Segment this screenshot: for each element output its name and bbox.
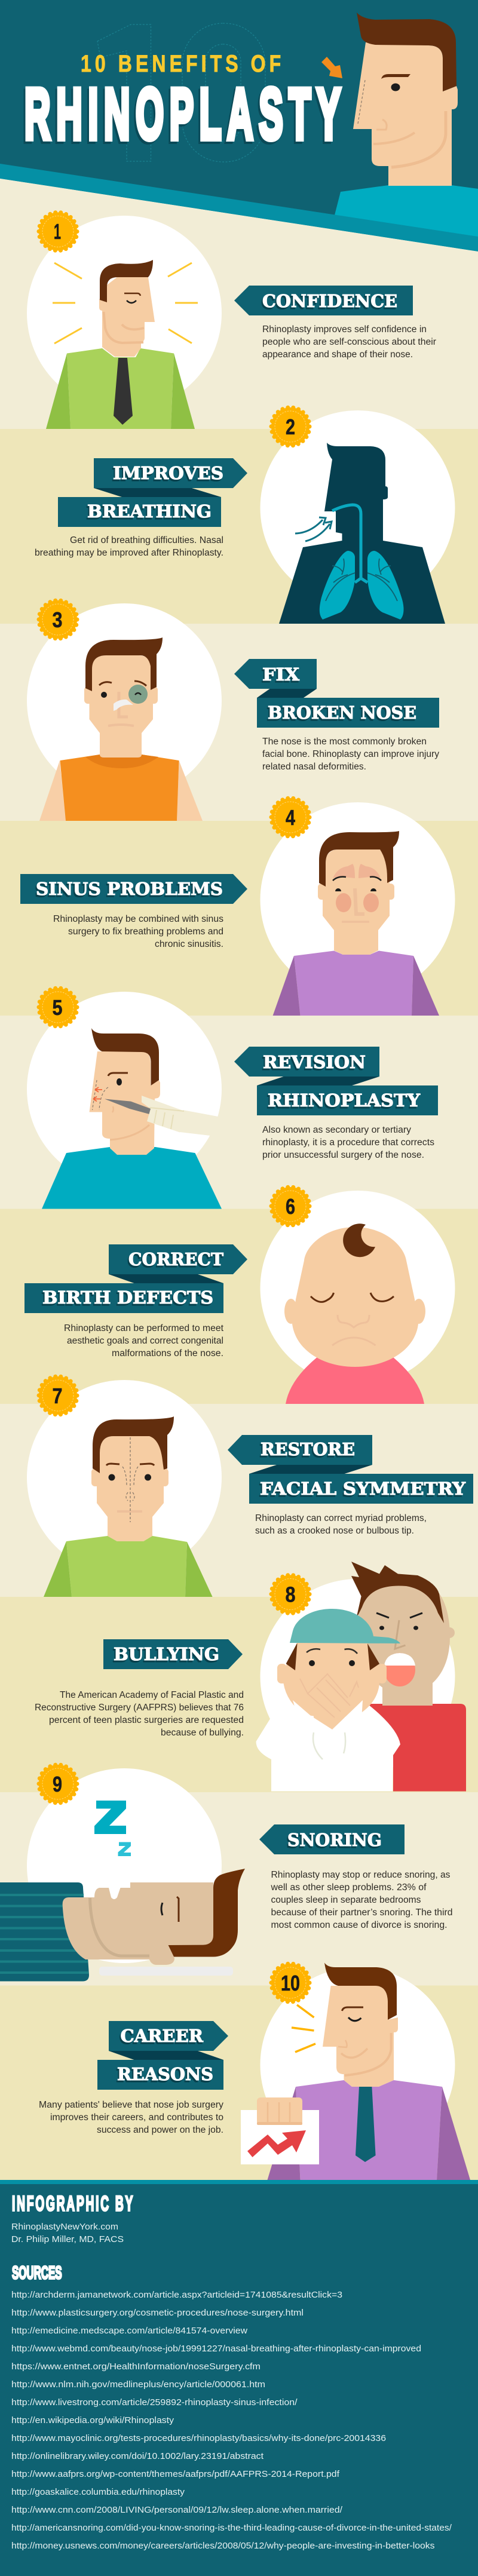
character: sleeping man bbox=[0, 1869, 245, 1981]
ribbon heading: bullying: BULLYING bbox=[114, 1644, 219, 1664]
text: birth defects description: malformations of the nose. bbox=[112, 1348, 223, 1358]
list: source urls: http://americansnoring.com/did-you-know-snoring-is-the-third-leading-cause-of-divorce-in-the-united-states/ bbox=[11, 2523, 452, 2533]
panel: 8 bullying bbox=[0, 1562, 478, 1792]
text: breathing description: breathing may be improved after Rhinoplasty. bbox=[35, 548, 223, 558]
panel: 7 restore facial symmetry bbox=[0, 1376, 478, 1597]
badge: number 5: 5 bbox=[53, 995, 62, 1020]
ribbon heading: career reasons bbox=[97, 2021, 228, 2090]
ribbon heading: sinus problems bbox=[20, 874, 247, 904]
text: bullying description bbox=[35, 1690, 244, 1738]
character: bully bbox=[351, 1562, 466, 1791]
list: source urls: http://money.usnews.com/money/careers/articles/2008/05/12/why-people-are-investing-in-better-looks bbox=[11, 2541, 435, 2551]
text: credits: Dr. Philip Miller, MD, FACS bbox=[11, 2234, 124, 2244]
list: source urls: http://www.webmd.com/beauty/nose-job/19991227/nasal-breathing-after-rhinoplasty-can-improved bbox=[11, 2344, 421, 2354]
ribbon heading: revision rhinoplasty bbox=[234, 1047, 438, 1115]
text: revision description: Also known as secondary or tertiary bbox=[262, 1125, 411, 1135]
text: revision description: rhinoplasty, it is a procedure that corrects bbox=[262, 1137, 434, 1148]
badge: number 5 bbox=[39, 988, 77, 1026]
badge: number 3: 3 bbox=[53, 608, 62, 632]
ribbon heading: snoring bbox=[259, 1824, 405, 1854]
badge: number 10 bbox=[271, 1964, 310, 2002]
text: broken nose description: related nasal deformities. bbox=[262, 762, 366, 772]
panel: 9 snoring bbox=[0, 1765, 478, 1986]
ribbon heading: improves breathing bbox=[58, 458, 247, 527]
decorative number 10 outline bbox=[97, 23, 265, 162]
text: confidence description: Rhinoplasty improves self confidence in bbox=[262, 324, 427, 335]
text: birth defects description: Rhinoplasty can be performed to meet bbox=[64, 1323, 224, 1333]
list: source urls: https://www.entnet.org/HealthInformation/noseSurgery.cfm bbox=[11, 2362, 261, 2372]
text: bullying description: The American Academy of Facial Plastic and bbox=[60, 1690, 244, 1700]
heading: infographic by: INFOGRAPHIC BY bbox=[12, 2191, 133, 2215]
text: revision description bbox=[262, 1125, 434, 1160]
list: source urls: http://goaskalice.columbia.edu/rhinoplasty bbox=[11, 2487, 185, 2497]
badge: number 7: 7 bbox=[53, 1384, 62, 1408]
text: breathing description: Get rid of breathing difficulties. Nasal bbox=[70, 535, 223, 545]
panel: 1 confidence bbox=[0, 179, 478, 429]
badge: number 9: 9 bbox=[53, 1772, 62, 1796]
badge: number 8: 8 bbox=[286, 1582, 295, 1607]
text: symmetry description: Rhinoplasty can correct myriad problems, bbox=[255, 1513, 427, 1523]
panel: footer bbox=[0, 2180, 478, 2576]
character: businessman with chart bbox=[241, 1962, 470, 2180]
text: snoring description bbox=[270, 1870, 453, 1930]
ribbon heading: correct birth defects: BIRTH DEFECTS bbox=[42, 1287, 213, 1308]
character: bullied kid bbox=[256, 1609, 400, 1791]
text: revision description: prior unsuccessful surgery of the nose. bbox=[262, 1150, 424, 1160]
character: man with symmetry line bbox=[44, 1416, 213, 1597]
icon: orange arrow to nose bbox=[321, 57, 342, 78]
text: snoring description: Rhinoplasty may stop or reduce snoring, as bbox=[271, 1870, 451, 1880]
text: sinus description: chronic sinusitis. bbox=[155, 939, 223, 949]
ribbon heading: correct birth defects: CORRECT bbox=[128, 1249, 223, 1269]
ribbon heading: restore facial symmetry: RESTORE bbox=[261, 1439, 355, 1459]
ribbon heading: confidence bbox=[234, 286, 413, 315]
ribbon heading: career reasons: CAREER bbox=[121, 2026, 204, 2046]
ribbon heading: confidence: CONFIDENCE bbox=[262, 291, 397, 311]
icon: breathing arrows bbox=[295, 517, 332, 541]
panel: header bbox=[0, 0, 478, 252]
text: bullying description: percent of teen plastic surgeries are requested bbox=[49, 1715, 244, 1725]
list: source urls: http://emedicine.medscape.com/article/841574-overview bbox=[11, 2326, 247, 2336]
badge: number 10: 10 bbox=[281, 1971, 300, 1995]
text: career description: success and power on the job. bbox=[97, 2125, 223, 2135]
text: symmetry description bbox=[255, 1513, 427, 1536]
heading: sources: SOURCES bbox=[12, 2262, 62, 2283]
badge: number 3 bbox=[39, 600, 77, 639]
badge: number 4 bbox=[271, 798, 310, 836]
ribbon heading: fix broken nose: BROKEN NOSE bbox=[268, 703, 416, 723]
text: career description: improves their careers, and contributes to bbox=[50, 2112, 223, 2123]
ribbon heading: revision rhinoplasty: RHINOPLASTY bbox=[268, 1090, 420, 1111]
panel: 2 improves breathing bbox=[0, 407, 478, 624]
badge: number 2: 2 bbox=[286, 415, 295, 439]
text: snoring description: most common cause of divorce is snoring. bbox=[271, 1920, 447, 1930]
character: man with broken nose bbox=[39, 637, 203, 821]
ribbon heading: bullying bbox=[103, 1639, 243, 1669]
text: confidence description: people who are self-conscious about their bbox=[262, 337, 436, 347]
text: credits: RhinoplastyNewYork.com bbox=[11, 2222, 118, 2232]
text: confidence description bbox=[262, 324, 436, 360]
ribbon heading: sinus problems: SINUS PROBLEMS bbox=[36, 879, 223, 899]
badge: number 6: 6 bbox=[286, 1194, 295, 1219]
ribbon heading: fix broken nose: FIX bbox=[262, 664, 300, 685]
panel: 3 fix broken nose bbox=[0, 600, 478, 821]
list: source urls: http://www.aafprs.org/wp-content/themes/aafprs/pdf/AAFPRS-2014-Report.pdf bbox=[11, 2469, 340, 2479]
icon: paper with rising chart bbox=[241, 2097, 319, 2164]
list: source urls: http://www.nlm.nih.gov/medlineplus/ency/article/000061.htm bbox=[11, 2379, 265, 2390]
text: bullying description: because of bullying. bbox=[161, 1728, 244, 1738]
text: bullying description: Reconstructive Surgery (AAFPRS) believes that 76 bbox=[35, 1703, 244, 1713]
icon: idea rays bbox=[292, 2005, 315, 2052]
list: source urls: http://www.plasticsurgery.org/cosmetic-procedures/nose-surgery.html bbox=[11, 2308, 304, 2318]
badge: number 9 bbox=[39, 1765, 77, 1803]
list: source urls: http://www.mayoclinic.org/tests-procedures/rhinoplasty/basics/why-its-done/prc-20014336 bbox=[11, 2433, 386, 2443]
ribbon heading: restore facial symmetry: FACIAL SYMMETRY bbox=[260, 1479, 465, 1499]
badge: number 4: 4 bbox=[286, 805, 295, 830]
character: man with scalpel bbox=[42, 1028, 251, 1209]
ribbon heading: improves breathing: IMPROVES bbox=[113, 463, 223, 483]
panel: 4 sinus problems bbox=[0, 798, 478, 1016]
text: snoring description: because of their partner’s snoring. The third bbox=[271, 1908, 453, 1918]
character: silhouette with lungs bbox=[279, 443, 445, 624]
ribbon heading: revision rhinoplasty: REVISION bbox=[263, 1052, 366, 1072]
text: sinus description bbox=[53, 914, 223, 949]
text: career description bbox=[39, 2100, 223, 2135]
badge: number 8 bbox=[271, 1575, 310, 1613]
list: source urls: http://www.livestrong.com/article/259892-rhinoplasty-sinus-infection/ bbox=[11, 2397, 298, 2408]
list: source urls bbox=[11, 2290, 452, 2551]
character: man in profile bbox=[335, 13, 478, 239]
badge: number 7 bbox=[39, 1376, 77, 1415]
ribbon heading: snoring: SNORING bbox=[287, 1830, 382, 1850]
text: sinus description: Rhinoplasty may be combined with sinus bbox=[53, 914, 223, 924]
ribbon heading: improves breathing: BREATHING bbox=[87, 501, 212, 522]
icon: confidence rays bbox=[53, 263, 198, 344]
list: source urls: http://www.cnn.com/2008/LIVING/personal/09/12/lw.sleep.alone.when.married/ bbox=[11, 2505, 343, 2515]
title: rhinoplasty: RHINOPLASTY bbox=[24, 74, 341, 155]
text: broken nose description bbox=[262, 737, 439, 772]
panel: 10 career reasons bbox=[0, 1962, 478, 2181]
character: confident man bbox=[46, 260, 195, 429]
text: broken nose description: facial bone. Rhinoplasty can improve injury bbox=[262, 749, 439, 759]
character: baby bbox=[284, 1223, 425, 1404]
text: breathing description bbox=[35, 535, 223, 558]
text: sinus description: surgery to fix breathing problems and bbox=[68, 927, 223, 937]
ribbon heading: fix broken nose bbox=[234, 659, 439, 728]
character: man with sinuses bbox=[273, 831, 439, 1016]
text: birth defects description: aesthetic goals and correct congenital bbox=[67, 1336, 223, 1346]
panel: 6 correct birth defects bbox=[0, 1187, 478, 1404]
badge: number 1 bbox=[39, 213, 77, 251]
text: snoring description: couples sleep in separate bedrooms bbox=[271, 1895, 421, 1905]
ribbon heading: career reasons: REASONS bbox=[117, 2064, 213, 2084]
badge: number 6 bbox=[271, 1187, 310, 1225]
text: confidence description: appearance and shape of their nose. bbox=[262, 349, 413, 360]
text: broken nose description: The nose is the most commonly broken bbox=[262, 737, 427, 747]
text: credits bbox=[11, 2222, 124, 2244]
badge: number 1: 1 bbox=[54, 219, 61, 244]
text: birth defects description bbox=[64, 1323, 224, 1358]
list: source urls: http://onlinelibrary.wiley.com/doi/10.1002/lary.23191/abstract bbox=[11, 2451, 264, 2461]
list: source urls: http://en.wikipedia.org/wiki/Rhinoplasty bbox=[11, 2415, 174, 2425]
title: 10 benefits of: 10 BENEFITS OF bbox=[81, 50, 281, 77]
text: career description: Many patients' believe that nose job surgery bbox=[39, 2100, 223, 2110]
icon: sleep letters Z z bbox=[94, 1801, 131, 1856]
ribbon heading: restore facial symmetry bbox=[228, 1435, 473, 1504]
list: source urls: http://archderm.jamanetwork.com/article.aspx?articleid=1741085&resultClick=3 bbox=[11, 2290, 342, 2300]
text: symmetry description: such as a crooked nose or bulbous tip. bbox=[255, 1526, 414, 1536]
panel: 5 revision rhinoplasty bbox=[0, 988, 478, 1209]
text: snoring description: well as other sleep problems. 23% of bbox=[270, 1882, 427, 1893]
badge: number 2 bbox=[271, 407, 310, 446]
ribbon heading: correct birth defects bbox=[24, 1244, 247, 1313]
